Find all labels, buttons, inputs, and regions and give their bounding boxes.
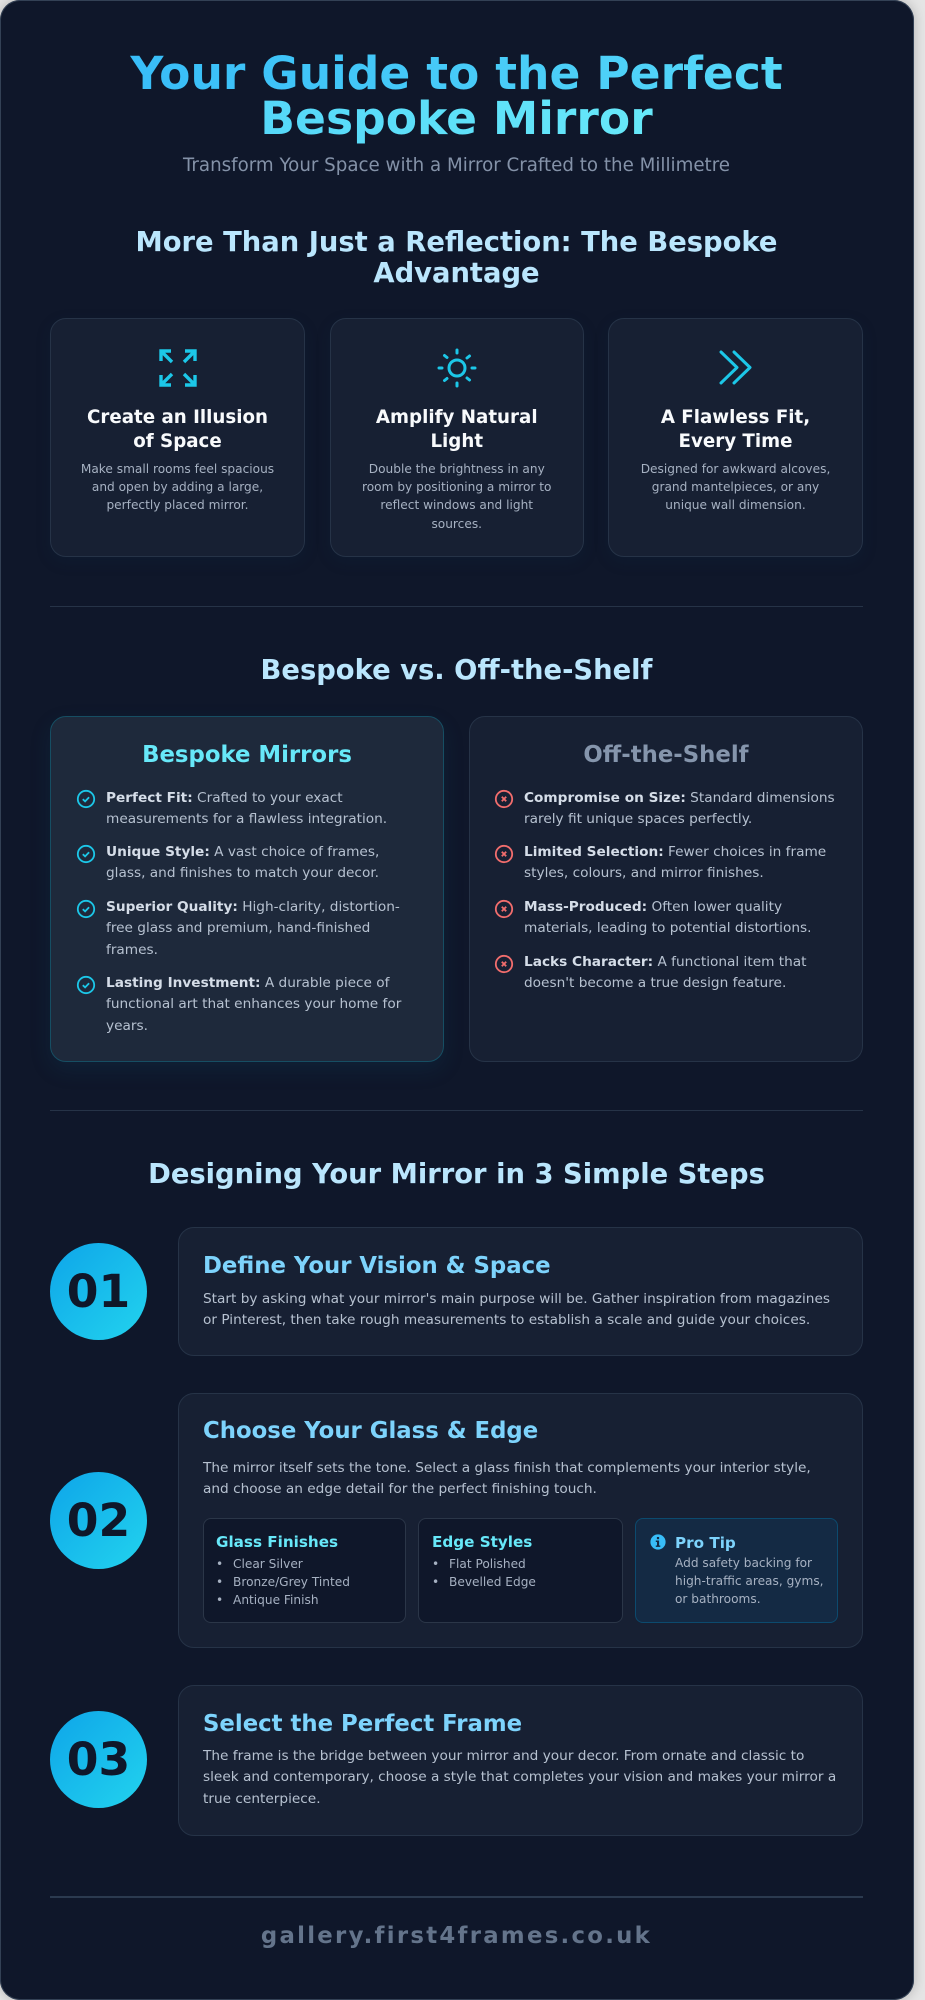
- card title: [661, 407, 810, 452]
- card title: [87, 407, 268, 452]
- step text: or Pinterest, then take rough measurements to establish a scale and guide your choices.: [203, 1312, 810, 1328]
- box list: Antique Finish: [233, 1593, 319, 1607]
- panel: create an illusion of space: [50, 318, 305, 557]
- box list: Bronze/Grey Tinted: [233, 1575, 350, 1589]
- list item: perfect fit: [76, 790, 387, 827]
- card description: room by positioning a mirror to: [362, 480, 551, 494]
- item text: glass, and finishes to match your decor.: [106, 865, 379, 881]
- card title: Every Time: [678, 431, 792, 452]
- card description: grand mantelpieces, or any: [652, 480, 819, 494]
- card title: [376, 407, 538, 452]
- subtitle: Transform Your Space with a Mirror Crafted to the Millimetre: [183, 155, 730, 176]
- card description: reflect windows and light: [380, 498, 533, 512]
- step heading: Define Your Vision & Space: [203, 1253, 551, 1279]
- card description: [641, 462, 830, 512]
- item text: [106, 899, 400, 958]
- icon: cross: [494, 900, 514, 918]
- card description: Designed for awkward alcoves,: [641, 462, 830, 476]
- step text: The frame is the bridge between your mirror and your decor. From ornate and classic to: [203, 1748, 804, 1764]
- step text: [203, 1746, 836, 1810]
- heading: comparison: Bespoke vs. Off-the-Shelf: [261, 655, 652, 686]
- item text: [106, 844, 379, 881]
- item text: Unique Style: A vast choice of frames,: [106, 844, 379, 860]
- box title: Edge Styles: [432, 1533, 532, 1551]
- icon: check: [76, 900, 96, 918]
- item text: Compromise on Size: Standard dimensions: [524, 790, 835, 806]
- icon: check: [76, 790, 96, 808]
- item text: [524, 790, 835, 827]
- box: glass finishes: [203, 1518, 406, 1623]
- item text: Limited Selection: Fewer choices in frame: [524, 844, 826, 860]
- item text: styles, colours, and mirror finishes.: [524, 865, 764, 881]
- card description: [362, 462, 551, 531]
- icon: expand arrows: [159, 349, 197, 387]
- list item: limited selection: [494, 844, 826, 881]
- panel: amplify natural light: [330, 318, 584, 557]
- icon: info: [650, 1534, 666, 1550]
- heading: steps: Designing Your Mirror in 3 Simple Steps: [148, 1159, 765, 1190]
- panel: step 2: [178, 1393, 863, 1648]
- card description: [81, 462, 274, 512]
- item text: Mass-Produced: Often lower quality: [524, 899, 782, 915]
- box list: •: [216, 1575, 223, 1589]
- list item: unique style: [76, 844, 379, 881]
- step heading: Choose Your Glass & Edge: [203, 1418, 538, 1444]
- icon: cross: [494, 954, 514, 974]
- title: Bespoke Mirror: [260, 92, 653, 145]
- panel: off-the-shelf: [469, 716, 863, 1062]
- icon: cross: [494, 844, 514, 864]
- item text: [106, 975, 402, 1034]
- tip text: [675, 1554, 824, 1609]
- box list: •: [432, 1557, 439, 1571]
- item text: Lasting Investment: A durable piece of: [106, 975, 389, 991]
- list item: lasting investment: [76, 975, 402, 1034]
- step number 02: 02: [67, 1494, 130, 1547]
- panel: a flawless fit: [608, 318, 863, 557]
- panel: bespoke mirrors: [50, 716, 444, 1062]
- step text: and choose an edge detail for the perfect finishing touch.: [203, 1481, 597, 1497]
- box list: •: [216, 1557, 223, 1571]
- item text: frames.: [106, 942, 158, 958]
- item text: functional art that enhances your home for: [106, 996, 401, 1012]
- box list: Clear Silver: [233, 1557, 303, 1571]
- item text: Lacks Character: A functional item that: [524, 954, 807, 970]
- card title: Light: [430, 431, 483, 452]
- item text: rarely fit unique spaces perfectly.: [524, 811, 752, 827]
- item text: free glass and premium, hand-finished: [106, 920, 370, 936]
- box: edge styles: [418, 1518, 623, 1623]
- box: pro tip: [635, 1518, 838, 1623]
- panel heading: Bespoke Mirrors: [142, 742, 352, 768]
- list item: superior quality: [76, 899, 400, 958]
- card title: Amplify Natural: [376, 407, 538, 428]
- step number 03: 03: [67, 1733, 130, 1786]
- item text: [524, 954, 807, 991]
- item text: Perfect Fit: Crafted to your exact: [106, 790, 343, 806]
- box list: Flat Polished: [449, 1557, 526, 1571]
- step number 01: 01: [67, 1265, 130, 1318]
- tip text: Add safety backing for: [675, 1556, 812, 1570]
- card description: sources.: [431, 517, 482, 531]
- panel: step 3: [178, 1685, 863, 1836]
- item text: [524, 844, 826, 881]
- step text: sleek and contemporary, choose a style that completes your vision and makes your mirror a: [203, 1769, 836, 1785]
- step text: Start by asking what your mirror's main purpose will be. Gather inspiration from magazines: [203, 1291, 830, 1307]
- heading: advantage: [136, 227, 777, 289]
- title: Your Guide to the Perfect: [130, 46, 783, 100]
- card title: of Space: [133, 431, 222, 452]
- step heading: Select the Perfect Frame: [203, 1711, 522, 1737]
- box list: [216, 1557, 350, 1607]
- card description: Make small rooms feel spacious: [81, 462, 274, 476]
- heading: advantage: Advantage: [373, 258, 540, 289]
- icon: cross: [494, 790, 514, 808]
- panel heading: Off-the-Shelf: [583, 742, 749, 768]
- item text: [524, 899, 811, 936]
- step number 02: [50, 1472, 147, 1569]
- card description: unique wall dimension.: [665, 498, 806, 512]
- card description: Double the brightness in any: [369, 462, 545, 476]
- card title: Create an Illusion: [87, 407, 268, 428]
- box list: •: [216, 1593, 223, 1607]
- step text: true centerpiece.: [203, 1791, 321, 1807]
- heading: advantage: More Than Just a Reflection: The Bespoke: [136, 227, 777, 258]
- list item: compromise on size: [494, 790, 835, 827]
- icon: check: [76, 976, 96, 994]
- card description: perfectly placed mirror.: [106, 498, 249, 512]
- tip text: high-traffic areas, gyms,: [675, 1574, 824, 1588]
- item text: materials, leading to potential distortions.: [524, 920, 811, 936]
- item text: Superior Quality: High-clarity, distortion-: [106, 899, 400, 915]
- card title: A Flawless Fit,: [661, 407, 810, 428]
- tip title: Pro Tip: [675, 1534, 736, 1552]
- card description: and open by adding a large,: [92, 480, 263, 494]
- footer url: gallery.first4frames.co.uk: [261, 1923, 652, 1949]
- step text: [202, 1460, 811, 1497]
- step text: [203, 1291, 830, 1328]
- list item: mass-produced: [494, 899, 811, 936]
- step number 01: [50, 1243, 147, 1340]
- tip text: or bathrooms.: [675, 1592, 761, 1606]
- panel: step 1: [178, 1227, 863, 1356]
- icon: double chevron: [719, 350, 752, 385]
- item text: doesn't become a true design feature.: [524, 975, 786, 991]
- item text: years.: [106, 1018, 148, 1034]
- icon: check: [76, 844, 96, 864]
- box title: Glass Finishes: [216, 1533, 338, 1551]
- list item: lacks character: [494, 954, 807, 991]
- box list: •: [432, 1575, 439, 1589]
- box list: [432, 1557, 536, 1589]
- item text: measurements for a flawless integration.: [106, 811, 387, 827]
- title: [130, 46, 783, 145]
- icon: sun: [438, 348, 476, 388]
- step text: The mirror itself sets the tone. Select a glass finish that complements your interior style,: [203, 1460, 811, 1476]
- box list: Bevelled Edge: [449, 1575, 536, 1589]
- step number 03: [50, 1711, 147, 1808]
- item text: [106, 790, 387, 827]
